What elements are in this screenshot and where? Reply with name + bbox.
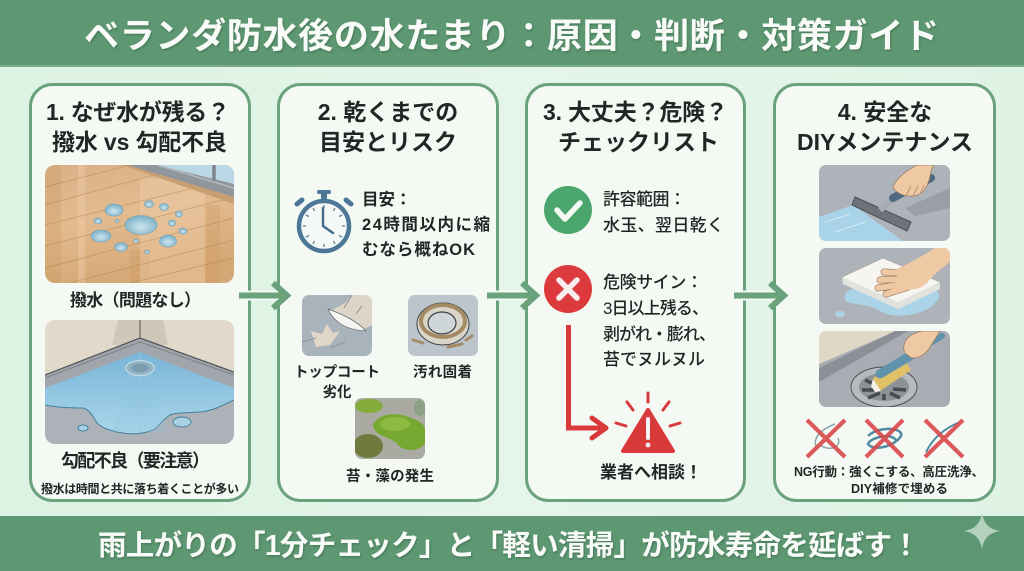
panel 1 heading — [46, 99, 230, 155]
danger text: 3日以上残る、 — [603, 298, 709, 318]
acceptable text: 水玉、翌日乾く — [603, 216, 724, 235]
panel 4 heading: 4. 安全な — [838, 99, 932, 125]
panel 2 heading — [318, 99, 458, 155]
water droplets — [91, 200, 187, 254]
illustration: poor slope puddle — [45, 320, 234, 444]
danger text: 剥がれ・膨れ、 — [603, 324, 716, 344]
danger text — [603, 273, 716, 369]
NG actions text: NG行動：強くこする、高圧洗浄、 — [794, 464, 984, 479]
panel 3 heading — [543, 99, 728, 155]
arrow: panel 1 to 2 — [239, 283, 287, 308]
header banner — [0, 0, 1024, 67]
caption: repellent: 撥水（問題なし） — [70, 291, 201, 310]
image: cloth wipe — [819, 248, 950, 324]
caption: topcoat — [294, 364, 380, 401]
NG actions text — [794, 464, 984, 496]
caption: moss: 苔・藻の発生 — [346, 467, 434, 485]
panel 3 heading: チェックリスト — [558, 129, 719, 155]
guideline text: 24時間以内に縮 — [362, 215, 490, 234]
image: drain brush — [819, 331, 950, 407]
arrow: panel 2 to 3 — [487, 283, 536, 308]
danger text: 苔でヌルヌル — [603, 350, 705, 369]
arrow: panel 3 to 4 — [734, 283, 784, 308]
panel: 4 safe DIY maintenance — [774, 84, 994, 500]
icons: prohibited actions — [807, 420, 963, 457]
footer message: 雨上がりの「1分チェック」と「軽い清掃」が防水寿命を延ばす！ — [98, 529, 920, 562]
icon: check — [544, 186, 592, 234]
panel: 3 checklist — [526, 84, 744, 500]
guideline text: 目安： — [362, 190, 412, 209]
caption: dirt: 汚れ固着 — [413, 363, 472, 381]
note: 撥水は時間と共に落ち着くことが多い — [41, 481, 239, 496]
panel 4 heading — [797, 99, 973, 155]
danger text: 危険サイン： — [603, 273, 703, 292]
icon: stopwatch — [297, 190, 351, 251]
image: stuck dirt ring — [408, 295, 478, 356]
illustration: water beads on wood floor — [45, 165, 234, 283]
consult text: 業者へ相談！ — [600, 463, 702, 482]
image: squeegee — [819, 165, 950, 241]
panel 4 heading: DIYメンテナンス — [797, 129, 973, 155]
icon: warning triangle — [616, 393, 680, 451]
panel: 1 why water remains — [30, 84, 250, 500]
image: moss — [353, 398, 426, 459]
caption: poor slope: 勾配不良（要注意） — [61, 451, 210, 471]
guideline text: むなら概ねOK — [362, 240, 475, 259]
NG actions text: DIY補修で埋める — [851, 481, 948, 496]
acceptable text — [603, 190, 724, 235]
image: topcoat deterioration — [302, 295, 372, 356]
panel 2 heading: 目安とリスク — [319, 129, 457, 155]
arrow: red to warning — [568, 325, 606, 438]
panel: 2 drying time and risks — [278, 84, 498, 500]
panel 3 heading: 3. 大丈夫？危険？ — [543, 99, 728, 125]
acceptable text: 許容範囲： — [603, 190, 686, 209]
title: ベランダ防水後の水たまり：原因・判断・対策ガイド — [84, 16, 939, 56]
footer banner — [0, 513, 1024, 571]
icon: cross — [544, 265, 592, 313]
caption: topcoat: トップコート — [294, 364, 380, 381]
icon: sparkle — [964, 513, 1000, 549]
panel 1 heading: 撥水 vs 勾配不良 — [52, 129, 227, 155]
panel 1 heading: 1. なぜ水が残る？ — [46, 99, 230, 125]
guideline text — [362, 190, 490, 259]
caption: topcoat: 劣化 — [322, 384, 352, 401]
panel 2 heading: 2. 乾くまでの — [318, 99, 458, 125]
